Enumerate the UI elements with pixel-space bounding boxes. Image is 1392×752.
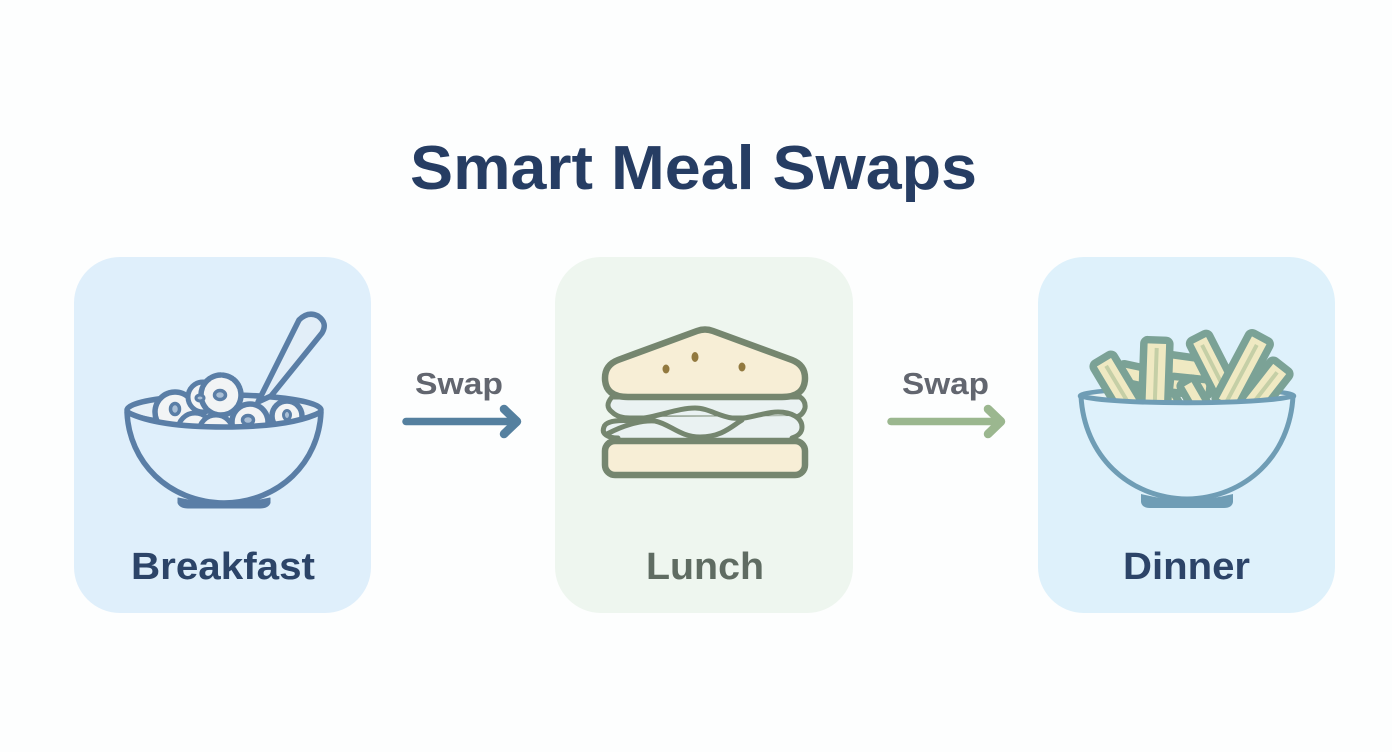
icon: cereal bowl bbox=[127, 314, 324, 508]
swap arrow 1: Swap bbox=[415, 366, 503, 401]
label: breakfast: Breakfast bbox=[131, 546, 315, 588]
swap arrow 2: Swap bbox=[902, 366, 989, 401]
label: lunch: Lunch bbox=[646, 546, 764, 588]
panel: lunch bbox=[555, 257, 853, 613]
icon: sandwich bbox=[603, 330, 805, 475]
panel: dinner bbox=[1038, 257, 1335, 613]
fries bbox=[1092, 331, 1291, 417]
icon: bowl of fries bbox=[1080, 331, 1294, 508]
title: Smart Meal Swaps bbox=[410, 134, 977, 203]
label: dinner: Dinner bbox=[1123, 546, 1250, 588]
swap arrow 2 bbox=[891, 366, 1001, 434]
swap arrow 1 bbox=[406, 366, 517, 434]
panel: breakfast bbox=[74, 257, 371, 613]
